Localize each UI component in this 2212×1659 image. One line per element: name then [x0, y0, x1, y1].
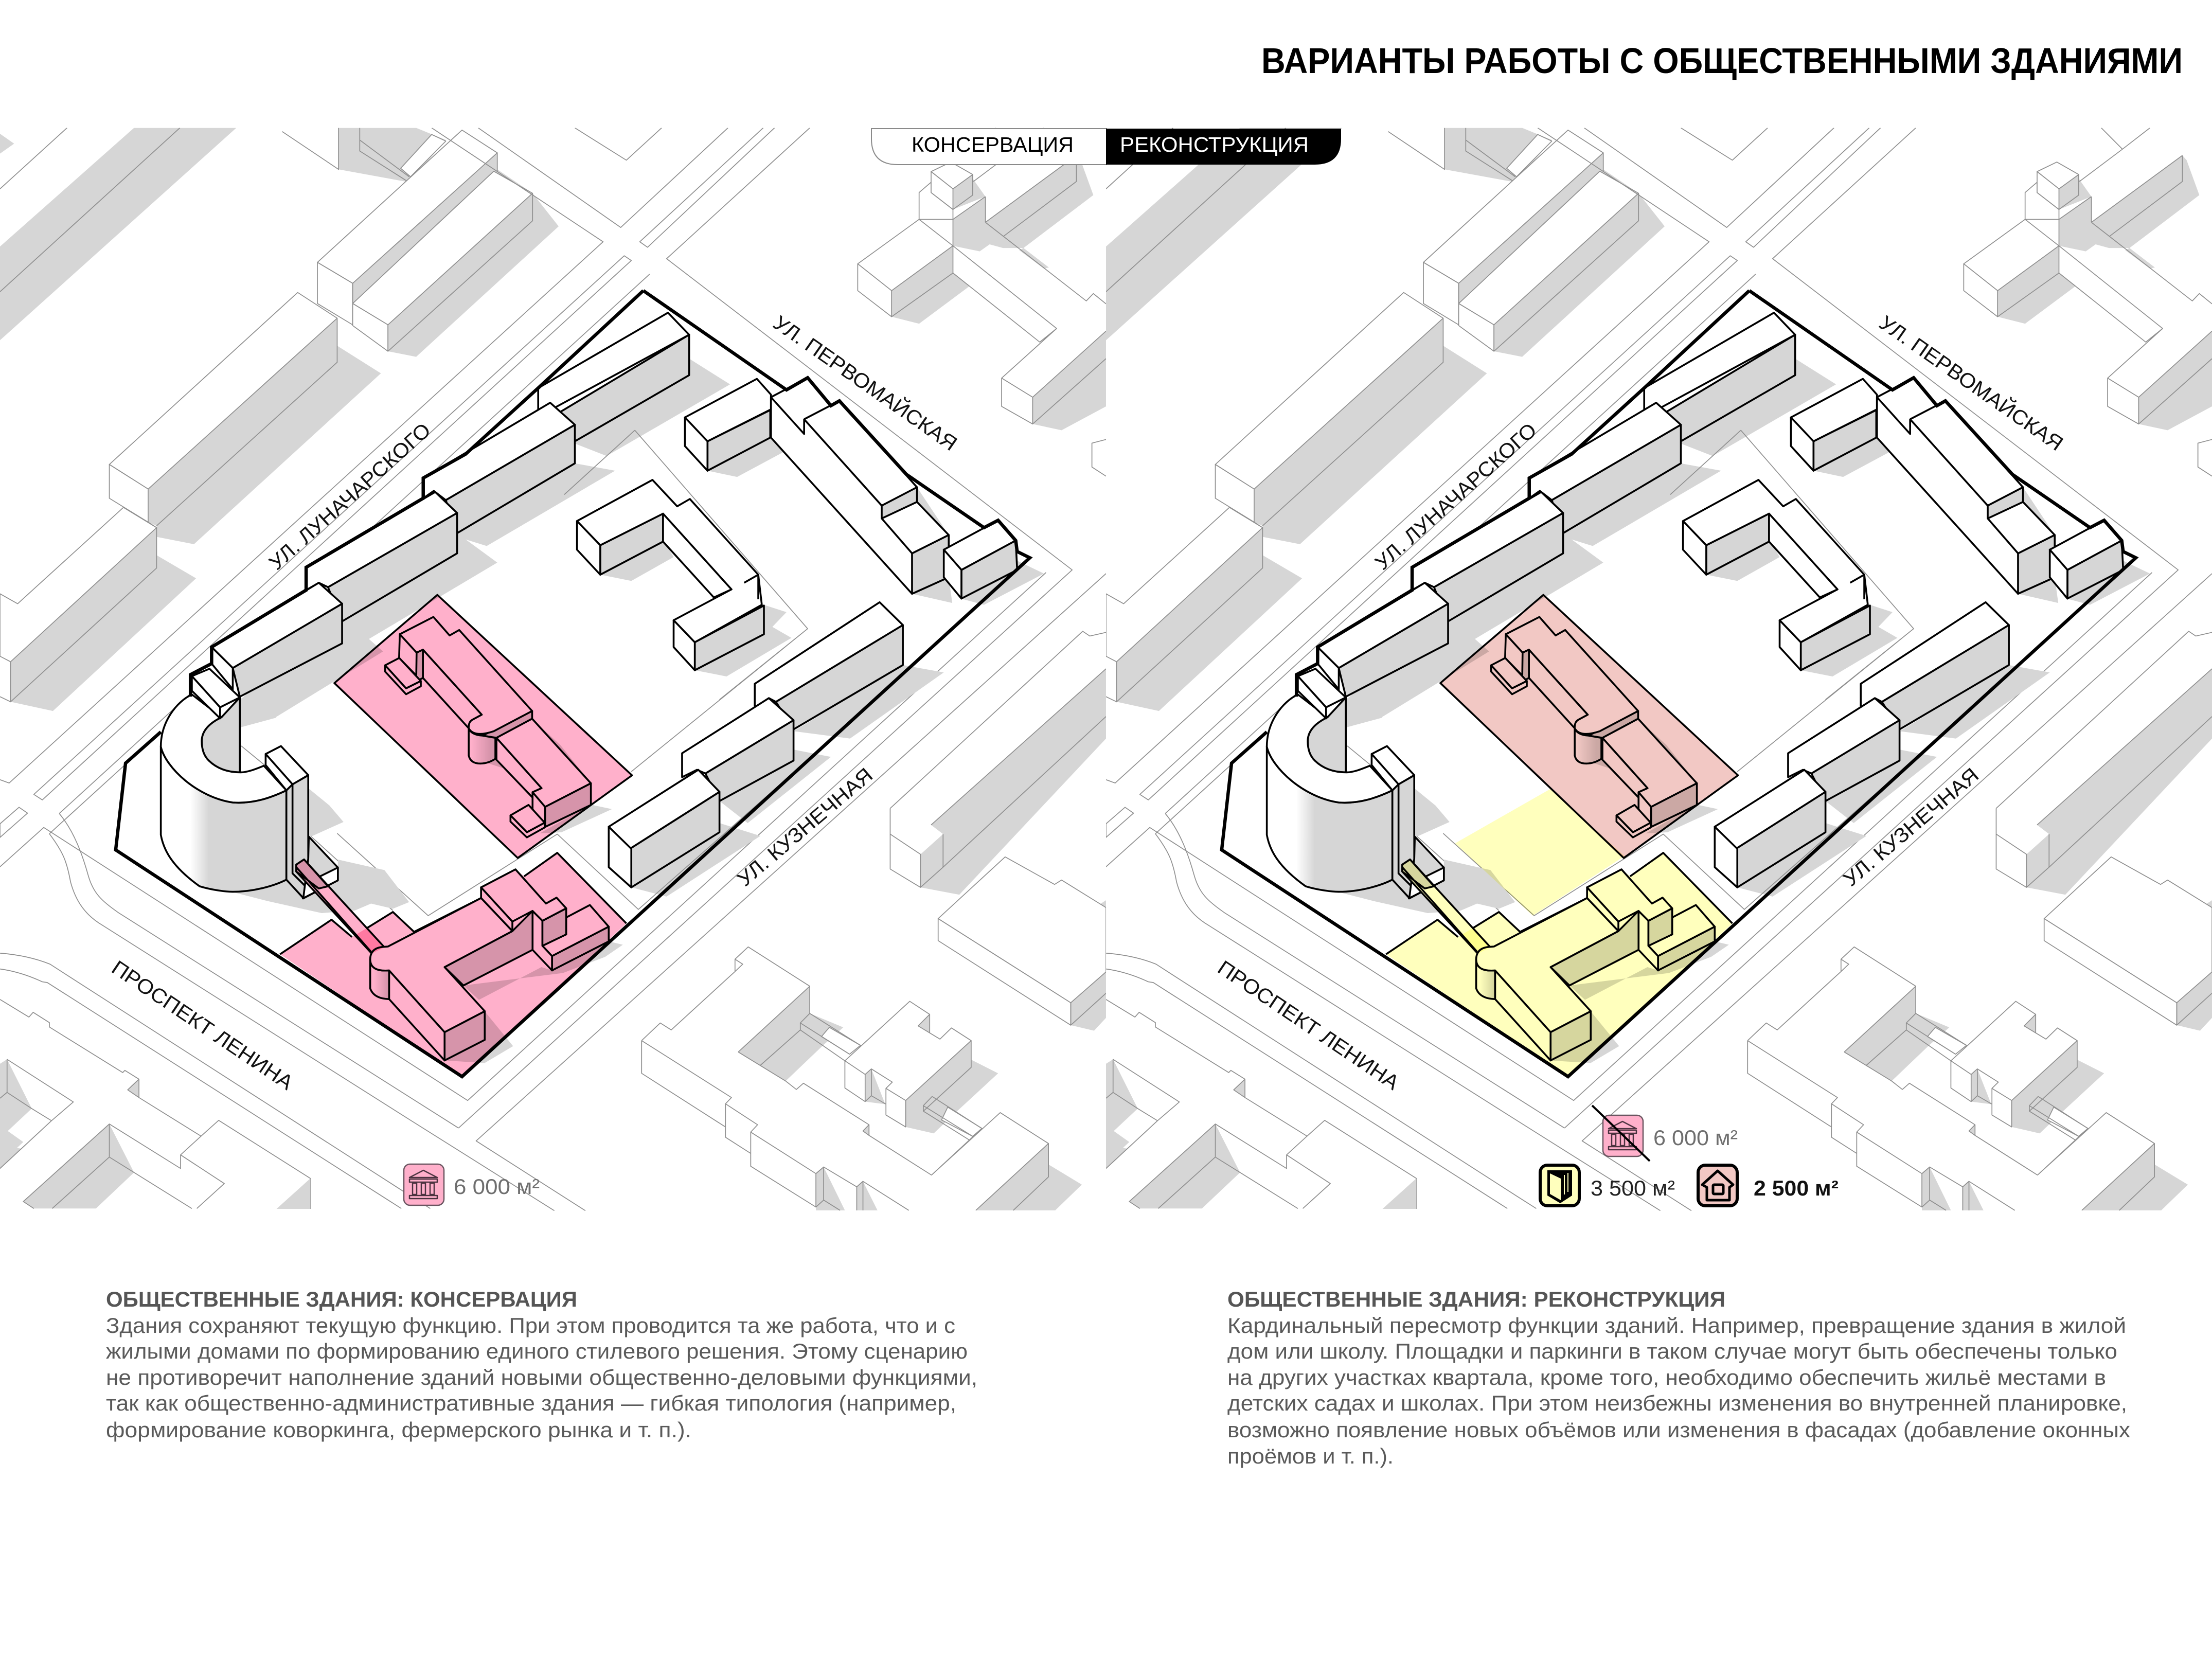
- overlay: public land plot pink, south: [280, 853, 627, 1077]
- paragraph: проёмов и т. п.).: [1227, 1444, 1394, 1468]
- street label: Lenin avenue: ПРОСПЕКТ ЛЕНИНА: [108, 956, 297, 1095]
- building: Lunacharskogo slab 4: [211, 583, 342, 697]
- main roof: [370, 869, 566, 1060]
- overlay: public land plot pink, north: [334, 595, 632, 858]
- context: tower building north-east: [858, 128, 1106, 430]
- paragraph: формирование коворкинга, фермерского рынка и т. п.).: [106, 1418, 691, 1442]
- city block: site ground with boundary fill: [192, 670, 1322, 692]
- street label: Kuznechnaya (right): УЛ. КУЗНЕЧНАЯ: [1839, 763, 1983, 891]
- plot outline: [280, 853, 627, 954]
- area value: 6 000 м²: [454, 1174, 540, 1199]
- public building 2: [280, 853, 627, 1063]
- paragraph: [1227, 1313, 2130, 1468]
- paragraph: детских садах и школах. При этом неизбежны изменения во внутренней планировке,: [1227, 1391, 2127, 1415]
- overlay: school yard yellow: [1455, 789, 1625, 916]
- area value: 2 500 м²: [1754, 1176, 1839, 1200]
- heading: ОБЩЕСТВЕННЫЕ ЗДАНИЯ: РЕКОНСТРУКЦИЯ: [1227, 1287, 1725, 1311]
- street label: Lunacharskogo (right): УЛ. ЛУНАЧАРСКОГО: [1371, 419, 1541, 575]
- overlay: residential plot pale pink: [1440, 595, 1738, 858]
- overlay: pink passage: [296, 860, 384, 954]
- context: surrounding city blocks north: [0, 128, 1106, 1211]
- legend right: housing 2500: [1698, 1165, 1839, 1206]
- icon: house: [1698, 1165, 1737, 1206]
- paragraph: Здания сохраняют текущую функцию. При этом проводится та же работа, что и с: [106, 1313, 955, 1337]
- paragraph: жилыми домами по формированию единого стилевого решения. Этому сценарию: [106, 1339, 968, 1363]
- tab: conservation: [871, 129, 1107, 165]
- site boundary: [116, 291, 1030, 1077]
- street label: Lunacharskogo: УЛ. ЛУНАЧАРСКОГО: [265, 419, 435, 575]
- panel: conservation map: [0, 128, 1106, 1211]
- heading: ОБЩЕСТВЕННЫЕ ЗДАНИЯ: КОНСЕРВАЦИЯ: [106, 1287, 577, 1311]
- building: rotunda with annex: [161, 669, 409, 954]
- icon: temple: [404, 1164, 444, 1205]
- tab: reconstruction: РЕКОНСТРУКЦИЯ: [1120, 133, 1309, 156]
- context: Lenin avenue curbs: [0, 813, 555, 1211]
- legend right: school 3500: [1540, 1165, 1675, 1206]
- toggle tabs: [871, 129, 1341, 165]
- area value: 3 500 м²: [1591, 1176, 1675, 1200]
- paragraph: не противоречит наполнение зданий новыми общественно-деловыми функциями,: [106, 1365, 977, 1389]
- context: white strips between south-east housing: [822, 1027, 982, 1136]
- building: Pervomayskaya long block: [771, 378, 949, 594]
- panel: reconstruction map: [1106, 128, 2212, 1211]
- building: north end block: [944, 520, 1017, 599]
- building: Kuznechnaya slabs: [609, 602, 903, 887]
- paragraph: на других участках квартала, кроме того, необходимо обеспечить жильё местами в: [1227, 1365, 2106, 1389]
- icon: temple crossed: [1592, 1105, 1650, 1161]
- street label: Lenin avenue (right): ПРОСПЕКТ ЛЕНИНА: [1214, 956, 1403, 1095]
- context: outlines of south-east housing group: [641, 947, 1048, 1210]
- building: Lunacharskogo slab 1: [538, 313, 689, 441]
- tab: reconstruction: [1106, 129, 1341, 165]
- paragraph: дом или школу. Площадки и паркинги в таком случае могут быть обеспечены только: [1227, 1339, 2117, 1363]
- icon: book: [1540, 1165, 1579, 1206]
- rear wing: [444, 905, 609, 986]
- legend right: removed public function: [1592, 1105, 1738, 1161]
- legend left: public building 6000: [404, 1164, 540, 1205]
- paragraph: [106, 1313, 977, 1442]
- street label: Pervomayskaya: УЛ. ПЕРВОМАЙСКАЯ: [769, 311, 961, 455]
- building: courtyard C-shaped residence: [577, 480, 764, 670]
- lower wing: [496, 719, 591, 827]
- building: Lunacharskogo slab 3: [306, 492, 457, 621]
- overlay: yellow passage: [1402, 860, 1490, 954]
- building: north-east small block: [685, 379, 771, 471]
- context: shadows of south-east housing group: [738, 986, 1082, 1210]
- annex boxes: [385, 658, 545, 837]
- building: Lunacharskogo slab 2: [423, 403, 575, 533]
- paragraph: так как общественно-административные здания — гибкая типология (например,: [106, 1391, 956, 1415]
- paragraph: Кардинальный пересмотр функции зданий. Например, превращение здания в жилой: [1227, 1313, 2126, 1337]
- text block: conservation description: [106, 1287, 977, 1442]
- public building 1: [334, 595, 632, 858]
- street label: Pervomayskaya (right): УЛ. ПЕРВОМАЙСКАЯ: [1875, 311, 2067, 455]
- tab: conservation: КОНСЕРВАЦИЯ: [912, 133, 1074, 156]
- context: buildings east and south: [0, 631, 1106, 1211]
- upper wing: [399, 617, 532, 763]
- paragraph: возможно появление новых объёмов или изменения в фасадах (добавление оконных: [1227, 1418, 2130, 1442]
- courtyard thin site lines: [241, 430, 808, 916]
- plot outline: [334, 595, 632, 858]
- cast shadows inside the block: [240, 359, 1044, 897]
- area value: 6 000 м²: [1653, 1126, 1738, 1150]
- context: south-west buildings: [0, 1000, 310, 1209]
- text block: reconstruction description: [1227, 1287, 2130, 1468]
- street label: Kuznechnaya: УЛ. КУЗНЕЧНАЯ: [733, 763, 877, 891]
- overlay: school plot yellow, south: [1386, 853, 1733, 1077]
